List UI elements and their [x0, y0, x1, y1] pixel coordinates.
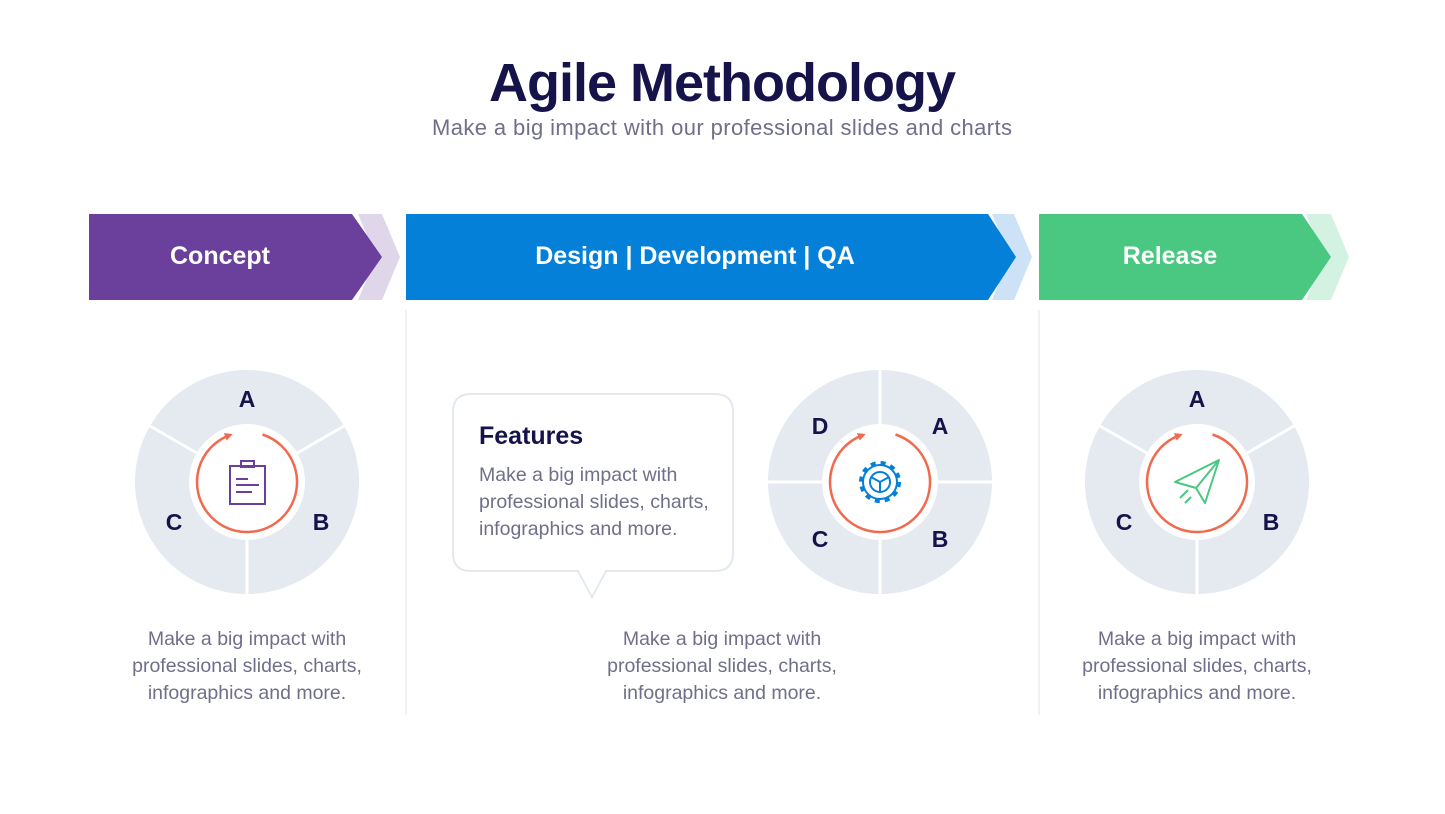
- icon: paper plane: [1175, 460, 1219, 503]
- cycle: design: D: [812, 413, 828, 439]
- icon: clipboard: [230, 461, 265, 504]
- cycle: release: B: [1263, 509, 1279, 535]
- text: design: infographics and more.: [623, 682, 821, 704]
- text: release: professional slides, charts,: [1082, 655, 1312, 677]
- icon: gear: [861, 463, 899, 501]
- cycle: design: C: [812, 526, 828, 552]
- title: Agile Methodology: [489, 53, 956, 113]
- callout: features: [453, 394, 733, 597]
- header: release: Release: [1123, 242, 1217, 270]
- subtitle: Make a big impact with our professional slides and charts: [432, 115, 1012, 140]
- cycle: release: A: [1189, 386, 1205, 412]
- cycle: design: [766, 368, 994, 596]
- text: concept: infographics and more.: [148, 682, 346, 704]
- header: concept: Concept: [170, 242, 271, 270]
- header: design: [406, 214, 1032, 300]
- cycle: release: [1085, 370, 1309, 596]
- cycle: design: A: [932, 413, 948, 439]
- cycle: release: C: [1116, 509, 1132, 535]
- callout: features: Features: [479, 422, 583, 450]
- text: concept: Make a big impact with: [148, 628, 346, 650]
- cycle: concept: C: [166, 509, 182, 535]
- header: design: Design | Development | QA: [535, 242, 855, 270]
- cycle: concept: [135, 370, 359, 596]
- header: release: [1039, 214, 1349, 300]
- text: design: professional slides, charts,: [607, 655, 837, 677]
- text: release: infographics and more.: [1098, 682, 1296, 704]
- text: design: Make a big impact with: [623, 628, 821, 650]
- text: release: Make a big impact with: [1098, 628, 1296, 650]
- callout: features: professional slides, charts,: [479, 491, 709, 513]
- cycle: concept: A: [239, 386, 255, 412]
- text: concept: professional slides, charts,: [132, 655, 362, 677]
- header: concept: [89, 214, 400, 300]
- callout: features: Make a big impact with: [479, 464, 677, 486]
- cycle: design: B: [932, 526, 948, 552]
- cycle: concept: B: [313, 509, 329, 535]
- callout: features: infographics and more.: [479, 518, 677, 540]
